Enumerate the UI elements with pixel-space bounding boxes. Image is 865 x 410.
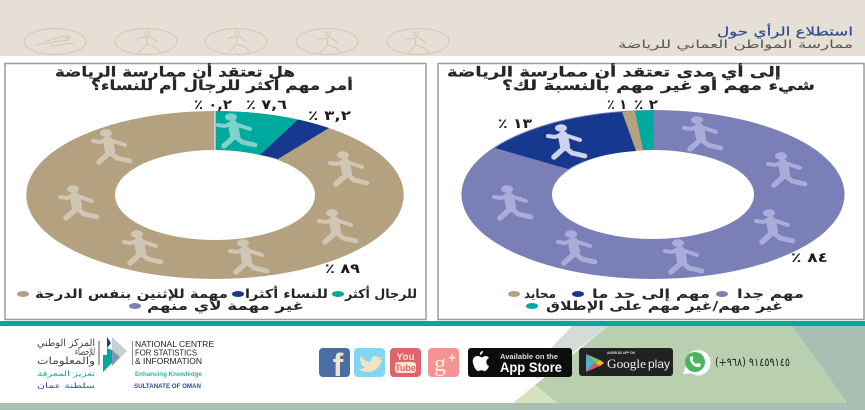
icon: sport circle, runner: [205, 28, 267, 54]
donut chart: right: [462, 110, 844, 279]
icon: google plus: +: [448, 350, 456, 365]
badge: Google Play: [579, 348, 673, 376]
legend: left donut: غير مهمة لأي منهم: [147, 298, 304, 313]
data labels: right donut: ١ ٪: [607, 97, 627, 113]
logo: English name: FOR STATISTICS: [135, 348, 197, 358]
data labels: right donut: ٢ ٪: [634, 97, 659, 113]
header subtitle: ممارسة المواطن العماني للرياضة: [618, 38, 853, 51]
logo: Arabic name: سلطنة عمان: [37, 382, 95, 390]
icon: facebook: [319, 347, 350, 383]
data labels: left donut: ٣,٢ ٪: [308, 108, 352, 124]
heading: right question: [447, 64, 815, 94]
heading: left question: [55, 64, 353, 94]
legend: left donut: للنساء أكثرا: [245, 285, 328, 301]
icon: youtube: [390, 348, 421, 377]
legend: right donut: [508, 286, 804, 313]
logo: Arabic name: والمعلومات: [37, 356, 95, 367]
icon: youtube: You: [396, 352, 415, 363]
icon: sport circle, ball player: [296, 28, 358, 54]
logo: English name: & INFORMATION: [135, 356, 202, 366]
data labels: right donut: ١٣ ٪: [498, 116, 533, 132]
heading: left question: هل تعتقد أن ممارسة الرياضة: [55, 64, 295, 80]
logo: English name: SULTANATE OF OMAN: [134, 384, 201, 390]
header band: [0, 0, 865, 56]
header title: استطلاع الرأي حول: [717, 24, 853, 40]
icon: google plus: [428, 348, 459, 377]
icon: sport circle, gymnast: [115, 28, 177, 54]
legend: right donut: مهم جدا: [737, 286, 804, 301]
legend: left donut: للرجال أكثر: [344, 285, 417, 301]
badge: App Store: App Store: [500, 359, 562, 375]
badge: App Store: [468, 348, 572, 377]
icon: youtube: Tube: [395, 363, 416, 373]
icon: google plus: g: [434, 351, 446, 377]
logo: Arabic name: للإحصاء: [75, 347, 95, 358]
data labels: right donut: [498, 97, 828, 266]
donut chart: left: [26, 111, 404, 279]
panel: men vs women importance: [5, 64, 426, 320]
icon: whatsapp: [683, 350, 711, 375]
legend: left donut: مهمة للإثنين بنفس الدرجة: [35, 286, 228, 301]
data labels: left donut: ٠,٢ ٪: [194, 97, 233, 113]
legend: right donut: مهم إلى حد ما: [592, 286, 710, 301]
icon: facebook: f: [333, 347, 344, 383]
data labels: left donut: [194, 97, 360, 277]
heading: right question: إلى أي مدى تعتقد أن ممارسة الرياضة: [447, 64, 781, 80]
heading: left question: أمر مهم أكثر للرجال أم للنساء؟: [91, 77, 353, 94]
logo: Arabic name: المركز الوطني: [37, 338, 95, 349]
icon: sport circle, swimmer: [24, 28, 86, 54]
badge: Google Play: play: [648, 357, 670, 371]
badge: Google Play: Google: [607, 356, 646, 371]
legend: left donut: [17, 285, 417, 313]
footer band: [0, 321, 865, 410]
data labels: right donut: ٨٤ ٪: [791, 250, 828, 266]
legend: right donut: محايد: [524, 286, 556, 301]
icon: sport circle, walker: [387, 28, 449, 54]
data labels: left donut: ٧,٦ ٪: [246, 97, 287, 113]
logo: Arabic name: تعزيز المعرفة: [37, 370, 95, 378]
data labels: left donut: ٨٩ ٪: [325, 261, 360, 277]
badge: Google Play: ANDROID APP ON: [607, 351, 635, 355]
panel: personal importance of sport: [438, 64, 864, 320]
badge: App Store: Available on the: [500, 354, 558, 361]
legend: right donut: غير مهم/غير مهم على الإطلاق: [546, 298, 783, 313]
logo: English name: Enhancing Knowledge: [135, 372, 203, 378]
logo: English name: [132, 339, 214, 390]
phone number: (+٩٦٨) ٩١٤٥٩١٤٥: [715, 355, 790, 369]
logo: English name: NATIONAL CENTRE: [135, 339, 214, 349]
heading: right question: شيء مهم أو غير مهم بالنسبة لك؟: [502, 77, 815, 94]
logo: Arabic name: [37, 338, 95, 390]
logo: emblem: [98, 337, 127, 372]
icon: twitter: [354, 348, 385, 377]
